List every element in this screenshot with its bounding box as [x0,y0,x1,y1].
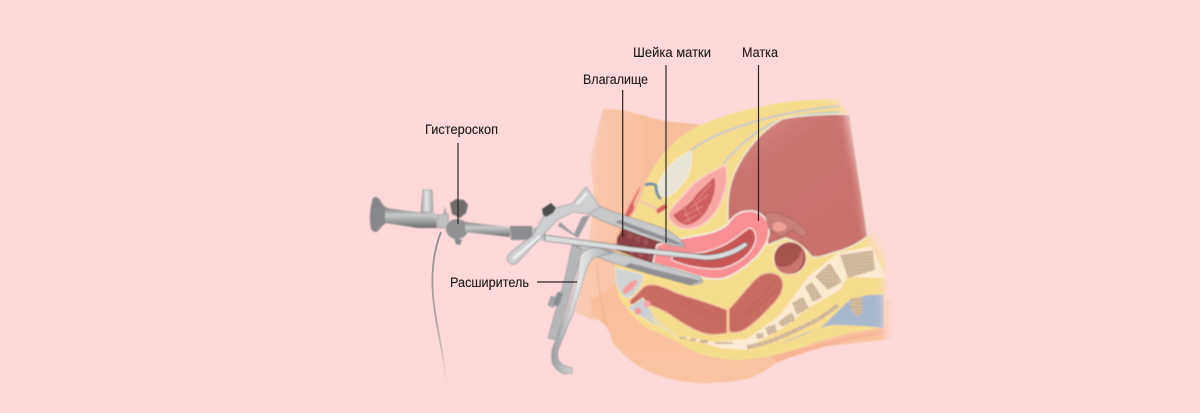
urethral catheter [645,184,661,199]
upper handle highlight [513,193,587,259]
label: Влагалище: Влагалище [583,72,648,87]
pivot arm [558,215,590,238]
valve [446,199,468,245]
rectum right lobe [729,273,783,332]
red tissue near cervix [656,204,668,214]
vagina dark interior [616,228,662,264]
lower blade shading [625,263,702,285]
yellow fat layer [614,99,886,360]
leader lines [458,65,758,282]
lower handle [552,248,613,374]
scope body [385,208,437,228]
pubic soft tissue [615,268,677,337]
upper blade shading [615,220,684,246]
rectal muscle fibres [665,280,778,322]
sacral blue tissue [780,295,884,344]
thumb screw [542,203,556,217]
collar [533,226,546,243]
ratchet bar [548,245,583,340]
central block [437,214,449,228]
speculum dilator [507,187,748,374]
upper blade [587,207,685,247]
bladder [658,151,691,197]
rectal sphere [774,242,806,274]
inner pink organ tissue [673,177,715,225]
abdominal wall bands [690,106,840,164]
ovary and fallopian tube [765,212,808,237]
skin fold line [597,263,606,325]
rectum left lobe [630,285,727,334]
pink organ outline [668,165,727,229]
uterine cavity [672,228,756,269]
uterus [653,211,769,279]
urethra strand [640,201,664,212]
eyepiece [370,197,388,232]
hysteroscopy illustration [369,46,891,384]
labia [620,187,640,232]
sheath connector [510,226,533,240]
hysteroscope [370,190,546,245]
spike [443,206,447,215]
spine cream strip [677,246,886,350]
peritoneal cavity [728,114,868,257]
label: Матка: Матка [742,45,778,60]
lower blade [577,245,703,285]
patient body cross-section [575,99,900,383]
scope upper port [421,190,433,212]
vertebrae [680,250,875,344]
label: Расширитель: Расширитель [450,275,529,290]
insertion rod [545,235,748,260]
scope sheath [465,222,510,237]
side screw [547,291,563,308]
darker peach band under fat [770,331,885,362]
label: Гистероскоп: Гистероскоп [425,122,498,137]
label: Шейка матки: Шейка матки [633,45,711,60]
upper handle [507,187,600,264]
sacral speckled line [747,305,838,347]
skin buttock region [590,286,891,384]
light cable [432,232,446,385]
skin upper region [574,108,700,320]
